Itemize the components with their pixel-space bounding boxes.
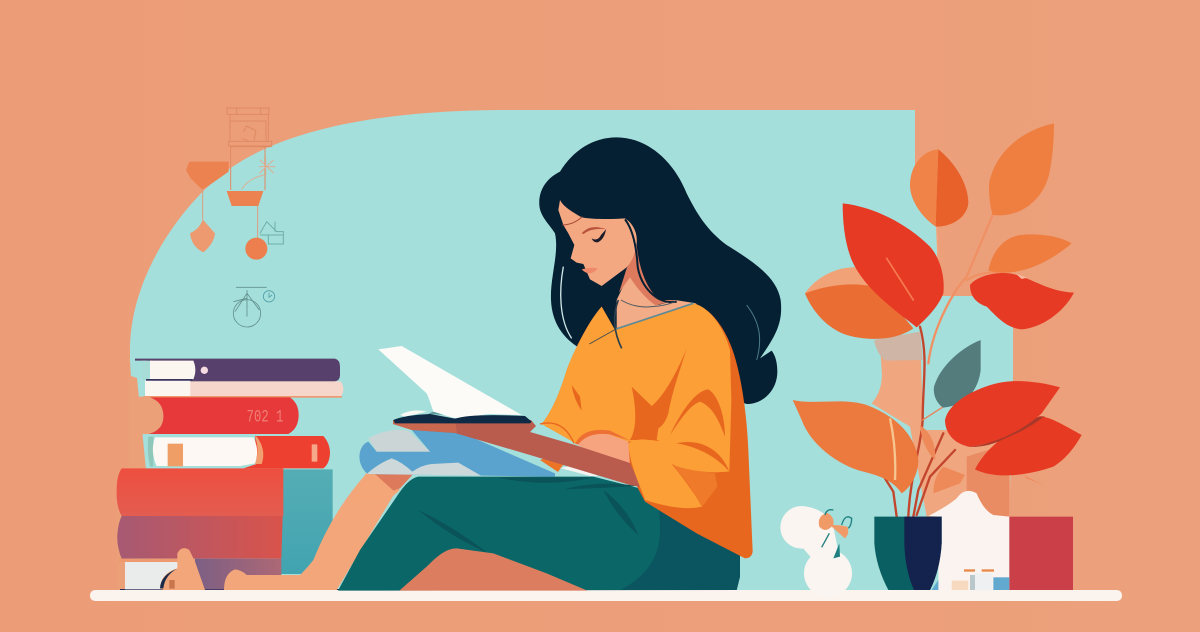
grey blanket lower <box>367 458 481 476</box>
woman's hair <box>539 137 781 404</box>
top right leaf <box>989 123 1054 215</box>
plant backdrop blobs <box>872 332 1010 517</box>
lower small leaves <box>920 425 1043 493</box>
left page edge <box>400 411 427 417</box>
under-sleeve shade <box>673 465 717 507</box>
skirt dark side <box>620 497 740 590</box>
upper right red leaf <box>945 381 1060 447</box>
thigh shade <box>375 474 413 491</box>
open book <box>378 346 532 423</box>
arch fold <box>670 389 725 437</box>
peach blob behind stems <box>872 333 1010 517</box>
sweater light area <box>542 303 731 472</box>
blanket and thigh <box>355 430 555 500</box>
woman's legs and feet <box>160 473 397 590</box>
neck <box>617 272 697 332</box>
lower left orange leaf <box>793 400 918 493</box>
white paper under hand <box>560 465 598 476</box>
central star fold <box>630 348 687 440</box>
forearm <box>393 420 641 487</box>
far foot <box>160 548 205 590</box>
white blob figure <box>780 506 852 597</box>
large red book <box>117 468 283 516</box>
strand of hair <box>625 219 677 302</box>
shelf frame outline <box>227 108 272 190</box>
book cover <box>393 414 532 423</box>
hair highlight left <box>561 267 572 338</box>
white shelf <box>90 590 1122 601</box>
neckline thin line <box>589 329 616 344</box>
hair highlight right <box>747 305 760 360</box>
light sleeve <box>628 440 715 508</box>
orange hanging shade <box>186 162 229 189</box>
sweater lower sleeve <box>628 440 717 508</box>
cake outline sketch <box>260 222 283 244</box>
floor shelf <box>90 589 1122 601</box>
hanging basket <box>227 191 263 206</box>
shelf shadow line <box>120 589 340 590</box>
hanging decor <box>186 108 283 327</box>
near foot <box>224 473 397 590</box>
skin under skirt <box>399 548 587 591</box>
pink book <box>143 379 343 398</box>
teal-grey leaf <box>934 340 981 408</box>
purple bottom book <box>193 559 281 589</box>
plant pot <box>874 517 942 590</box>
orange fruit <box>245 238 267 260</box>
forearm lit upper edge <box>393 420 457 433</box>
belly skin <box>576 433 630 465</box>
mauve book <box>117 516 283 559</box>
necklace <box>621 300 675 307</box>
red book with white pages <box>148 436 330 468</box>
skirt base <box>338 477 740 591</box>
small left fold <box>572 385 582 411</box>
white bottom book <box>118 559 195 589</box>
thigh skin <box>355 473 400 500</box>
woman's head and neck <box>558 200 697 338</box>
lower right red leaf <box>965 416 1082 475</box>
sleeve cuff line <box>540 423 574 443</box>
forearm and hand <box>393 420 641 487</box>
sweater dark base <box>542 303 753 558</box>
lower crease <box>677 442 729 472</box>
teal page bump <box>428 411 447 415</box>
skirt folds <box>418 477 638 553</box>
belly shadow stripe <box>575 430 630 444</box>
large red leaf <box>843 203 944 327</box>
face <box>558 200 637 286</box>
book stack <box>117 359 343 589</box>
small bow ornament <box>819 510 852 558</box>
right red leaf <box>970 273 1074 329</box>
top middle leaf <box>910 149 968 227</box>
forehead crease <box>562 217 582 225</box>
eyebrow <box>582 227 607 234</box>
grey blanket top <box>368 430 430 452</box>
round bulb sketch <box>233 287 275 327</box>
blue blanket <box>359 430 555 477</box>
peach column left of books <box>117 345 146 590</box>
hand <box>540 452 563 472</box>
teal wall panel <box>130 110 1013 590</box>
skirt <box>338 477 740 591</box>
purple top book <box>135 359 340 381</box>
potted plant <box>780 123 1082 597</box>
closed eye <box>592 229 606 242</box>
right upper orange leaf <box>988 234 1072 273</box>
white box behind pot <box>928 491 1009 590</box>
hanging cord <box>203 189 258 240</box>
red box <box>1009 517 1073 590</box>
darker peach patch <box>967 443 1009 517</box>
small plant sketch <box>242 157 275 189</box>
neck shadow <box>619 245 675 305</box>
raised white page <box>378 346 522 418</box>
stems <box>885 215 1003 517</box>
neckline strand <box>615 300 622 348</box>
left orange leaf <box>805 267 913 339</box>
peach book-spine notch <box>133 397 163 434</box>
hair mass <box>539 137 781 404</box>
red book with spine text <box>148 397 299 434</box>
sweater torso <box>540 300 753 558</box>
teal side book <box>281 469 333 574</box>
lips <box>582 268 598 273</box>
grey patch <box>874 332 923 361</box>
hanging leaf ornament <box>190 219 215 252</box>
red book with spine text: 702 1 <box>247 407 283 427</box>
small bottles <box>932 569 1009 590</box>
neckline strap <box>615 303 693 329</box>
